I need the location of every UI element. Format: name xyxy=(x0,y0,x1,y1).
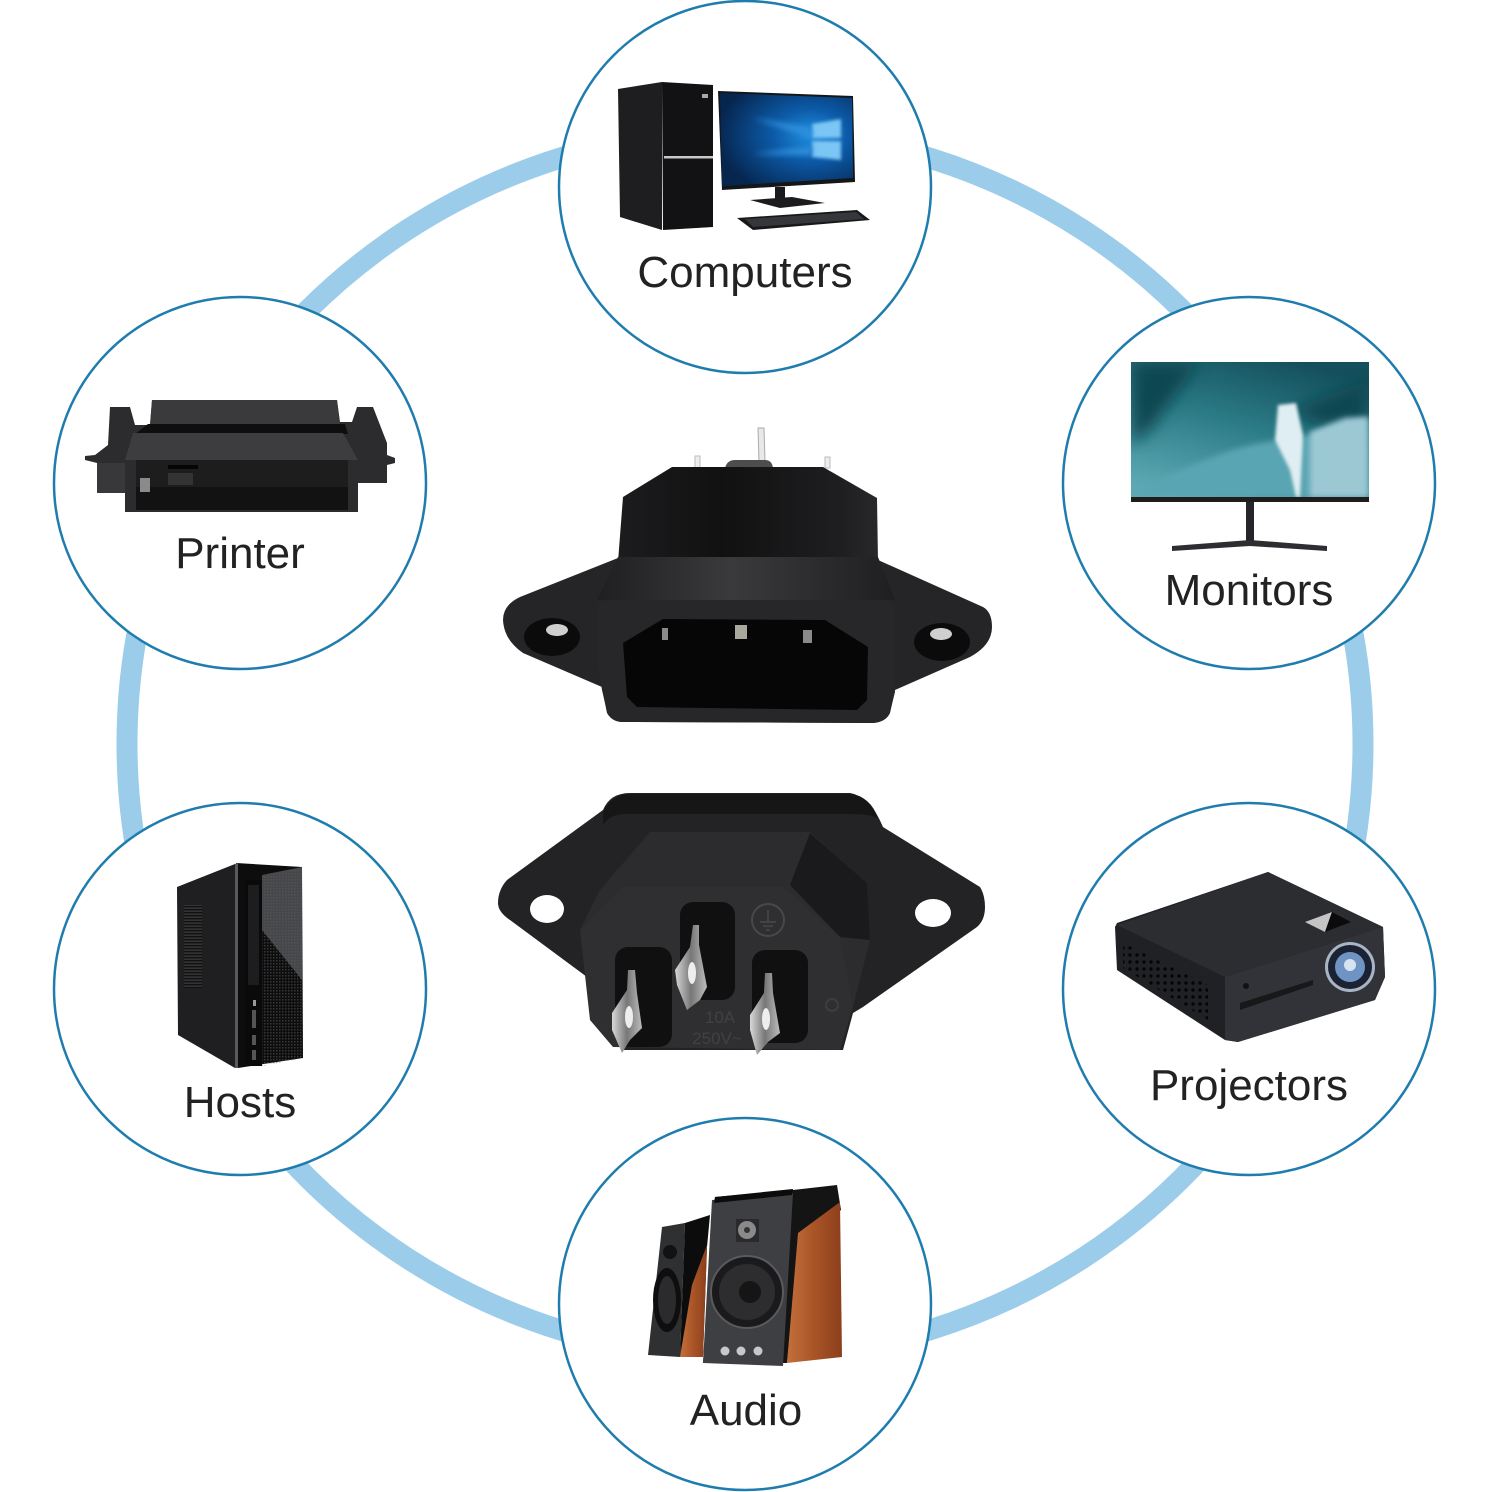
panel: monitors xyxy=(1063,297,1435,669)
label: monitors: Monitors xyxy=(1165,566,1333,615)
connecting ring xyxy=(127,130,1363,1358)
panel: projectors xyxy=(1063,803,1435,1175)
icon: power socket front view xyxy=(503,428,992,723)
rating text: 250V~ xyxy=(692,1029,742,1048)
panel: computers xyxy=(559,1,931,373)
label: audio: Audio xyxy=(690,1386,802,1435)
icon: small tower pc xyxy=(177,863,303,1068)
panel: printer xyxy=(54,297,426,669)
panel: audio xyxy=(559,1118,931,1490)
rating text: 10A xyxy=(705,1008,736,1027)
label: projectors: Projectors xyxy=(1150,1061,1348,1110)
panel: hosts xyxy=(54,803,426,1175)
icon: monitor xyxy=(1131,362,1369,551)
rating text xyxy=(692,1008,742,1048)
label: printer: Printer xyxy=(175,529,305,578)
icon: printer xyxy=(85,400,395,512)
label: hosts: Hosts xyxy=(184,1078,296,1127)
icon: desktop computer xyxy=(618,82,870,230)
icon: power socket rear view xyxy=(498,793,985,1055)
icon: speakers xyxy=(648,1185,842,1366)
icon: projector xyxy=(1115,872,1385,1042)
label: computers: Computers xyxy=(637,248,853,297)
